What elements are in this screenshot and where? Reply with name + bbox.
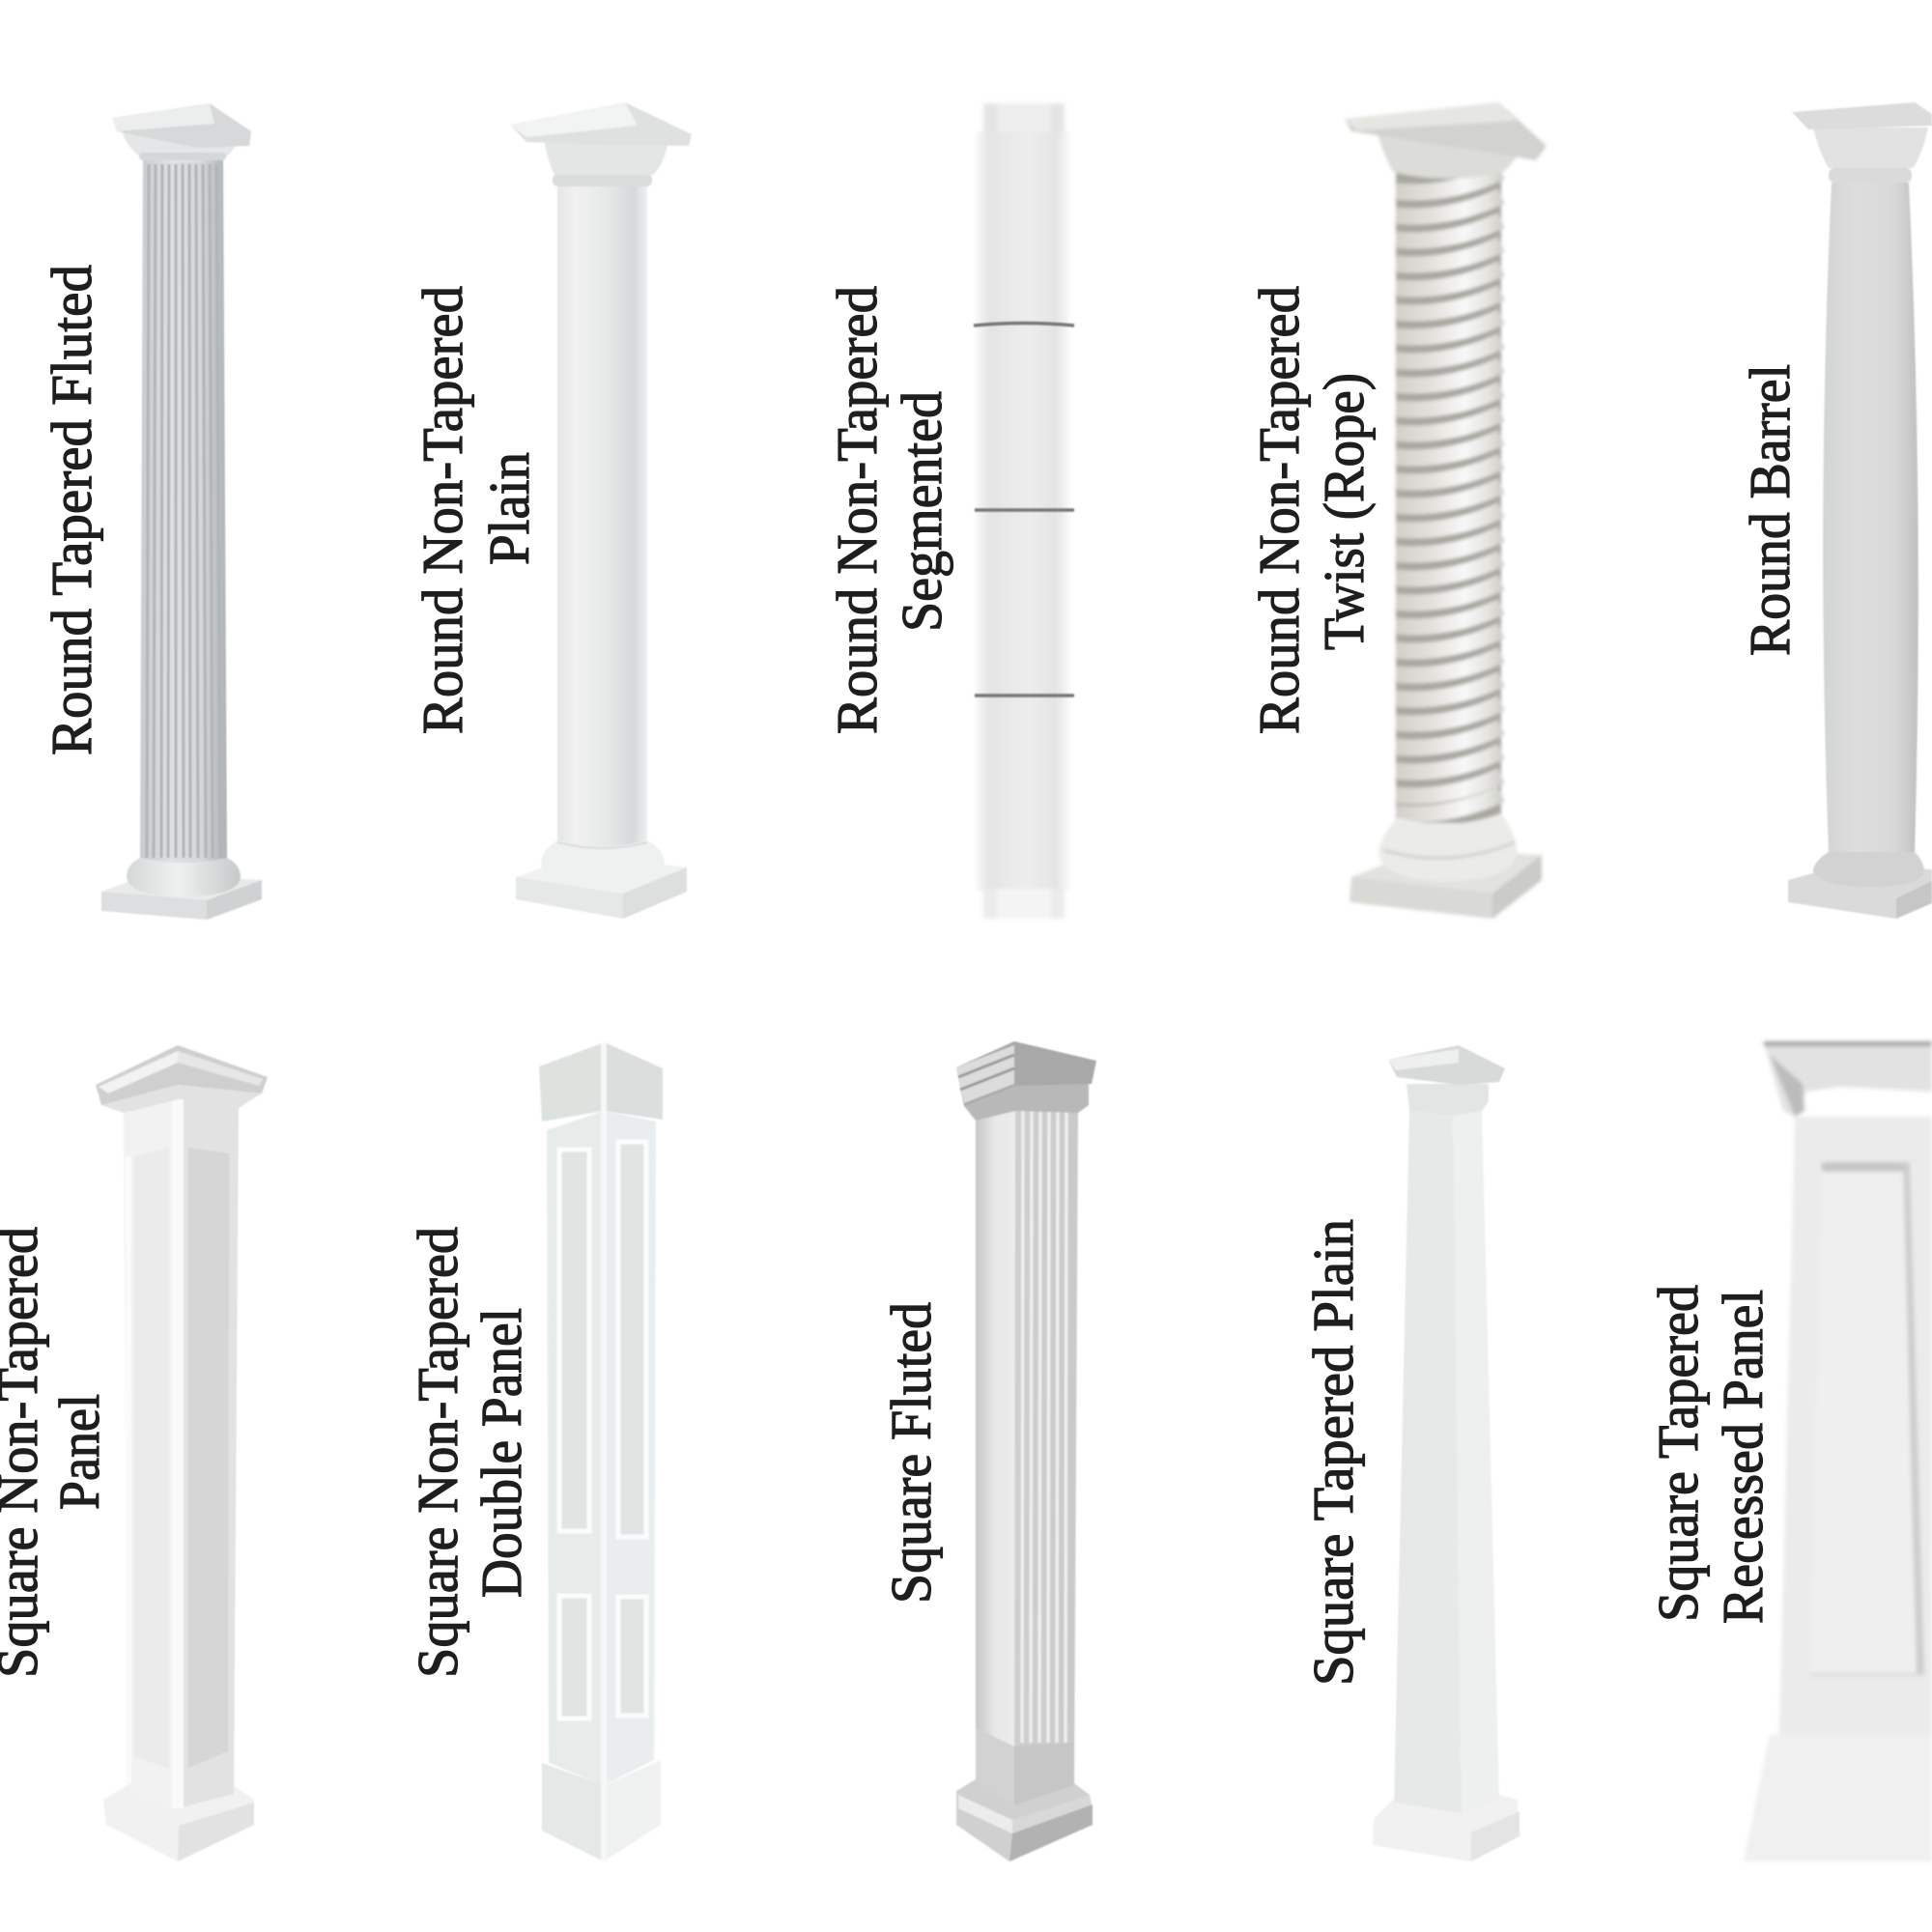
label: Round Non-Tapered Plain xyxy=(411,286,541,734)
column: Round Non-Tapered Twist (Rope) xyxy=(1345,102,1547,919)
label: Round Non-Tapered Twist (Rope) xyxy=(1247,286,1376,734)
label: Round Non-Tapered Plain: Round Non-Tapered xyxy=(411,286,474,734)
column: Square Non-Tapered Double Panel xyxy=(539,1042,663,1861)
label: Round Non-Tapered Segmented: Segmented xyxy=(890,391,953,632)
column: Round Non-Tapered Segmented xyxy=(974,103,1074,919)
column: Square Tapered Plain xyxy=(1373,1045,1520,1861)
column: Round Barrel xyxy=(1788,102,1932,919)
label: Round Non-Tapered Twist (Rope): Round Non-Tapered xyxy=(1247,286,1311,734)
column: Round Non-Tapered Plain xyxy=(510,102,692,919)
label: Square Tapered Recessed Panel: Recessed Panel xyxy=(1711,1290,1775,1624)
label: Round Non-Tapered Plain: Plain xyxy=(477,452,541,565)
column: Square Tapered Recessed Panel xyxy=(1744,1041,1932,1861)
label: Round Non-Tapered Segmented xyxy=(825,286,953,734)
label: Round Tapered Fluted: Round Tapered Fluted xyxy=(40,265,103,755)
label: Round Non-Tapered Segmented: Round Non-Tapered xyxy=(825,286,889,734)
label: Square Non-Tapered Panel: Panel xyxy=(47,1394,111,1510)
column: Round Tapered Fluted xyxy=(101,103,262,920)
label: Square Non-Tapered Panel xyxy=(0,1227,111,1678)
label: Square Tapered Recessed Panel: Square Tapered xyxy=(1646,1285,1710,1622)
column: Square Non-Tapered Panel xyxy=(96,1045,268,1861)
label: Round Barrel: Round Barrel xyxy=(1738,364,1802,656)
column: Square Fluted xyxy=(956,1041,1096,1861)
label: Square Fluted: Square Fluted xyxy=(879,1302,943,1604)
label: Square Non-Tapered Double Panel xyxy=(406,1227,533,1678)
label: Square Tapered Plain: Square Tapered Plain xyxy=(1301,1219,1365,1686)
label: Square Non-Tapered Double Panel: Square Non-Tapered xyxy=(406,1227,469,1678)
label: Round Non-Tapered Twist (Rope): Twist (Rope) xyxy=(1312,373,1376,650)
label: Square Tapered Recessed Panel xyxy=(1646,1285,1775,1624)
label: Square Non-Tapered Double Panel: Double Panel xyxy=(469,1308,533,1598)
